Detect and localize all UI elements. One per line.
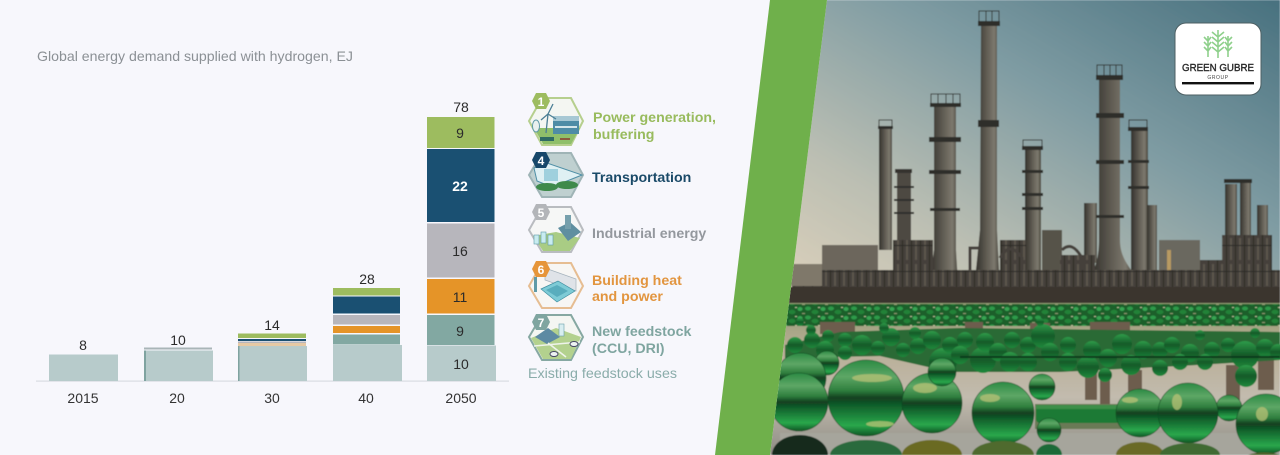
bar 2015: 2015: [67, 390, 99, 406]
bar 2030: 30: [264, 390, 280, 406]
bar 2040: 28: [359, 271, 375, 287]
legend item: power generation: [529, 93, 716, 145]
water: [770, 303, 1280, 455]
legend item: power generation: 1: [538, 95, 545, 109]
legend item: new feedstock: [529, 314, 691, 360]
bar 2050: 2050: [445, 390, 477, 406]
logo: [1175, 23, 1261, 95]
legend: [528, 93, 716, 381]
distant sphere field: [785, 304, 1280, 326]
bar 2020: 10: [170, 332, 186, 348]
bar 2050: 9: [456, 323, 464, 339]
bar 2050: 10: [453, 356, 469, 372]
chart title: Global energy demand supplied with hydrogen, EJ: [37, 48, 353, 64]
legend item: building heat and power: 6: [538, 263, 545, 277]
bar 2020: 20: [169, 390, 185, 406]
legend item: new feedstock: (CCU, DRI): [592, 341, 665, 357]
bar 2050: 9: [456, 125, 464, 141]
refinery towers: [790, 11, 1280, 290]
sky: [770, 0, 1280, 300]
sphere highlights: [852, 374, 1268, 427]
logo: GREEN GUBRE: [1182, 62, 1254, 74]
legend item: transportation: [529, 152, 691, 197]
dark shoreline: [770, 287, 1280, 304]
legend item: building heat and power: and power: [592, 289, 663, 305]
bar 2015: [49, 337, 118, 406]
legend item: industrial energy: 5: [538, 206, 545, 220]
axis line: [36, 380, 509, 382]
photo: refinery and green spheres on water: [770, 0, 1280, 455]
bar 2030: 14: [264, 317, 280, 333]
green diagonal band: [715, 0, 827, 455]
tube connecting spheres: [1036, 408, 1118, 424]
reflections of spheres: [772, 435, 1280, 455]
bar 2050: 11: [453, 289, 467, 305]
large green spheres: [770, 351, 1280, 454]
mid row of small spheres: [787, 318, 1280, 387]
bar 2020: [144, 332, 213, 406]
bar 2015: 8: [79, 337, 87, 353]
dark waterline between spheres: [960, 356, 1280, 358]
legend item: new feedstock: 7: [538, 316, 545, 330]
legend item: power generation: Power generation,: [593, 110, 716, 126]
legend item: power generation: buffering: [593, 127, 654, 143]
bar 2030: [238, 317, 307, 406]
legend item: existing feedstock uses: Existing feedstock uses: [528, 365, 677, 381]
legend item: new feedstock: New feedstock: [592, 324, 691, 340]
bar 2040: 40: [358, 390, 374, 406]
stacked bar chart: [36, 99, 509, 406]
bar 2050: 16: [452, 243, 468, 259]
legend item: industrial energy: [529, 204, 706, 252]
bar 2050: [427, 99, 496, 406]
legend item: industrial energy: Industrial energy: [592, 226, 706, 242]
legend item: building heat and power: Building heat: [592, 273, 682, 289]
legend item: transportation: 4: [538, 154, 545, 168]
bar 2040: [333, 271, 402, 406]
legend item: building heat and power: [529, 261, 682, 308]
bar 2050: 22: [452, 178, 468, 194]
legend item: transportation: Transportation: [592, 170, 691, 186]
logo: GROUP: [1207, 75, 1229, 81]
bar 2050: 78: [453, 99, 469, 115]
icon: wheat stalks: [1204, 30, 1232, 58]
dark green band behind the mid row: [785, 328, 1280, 372]
reflections in water: [820, 322, 1274, 408]
